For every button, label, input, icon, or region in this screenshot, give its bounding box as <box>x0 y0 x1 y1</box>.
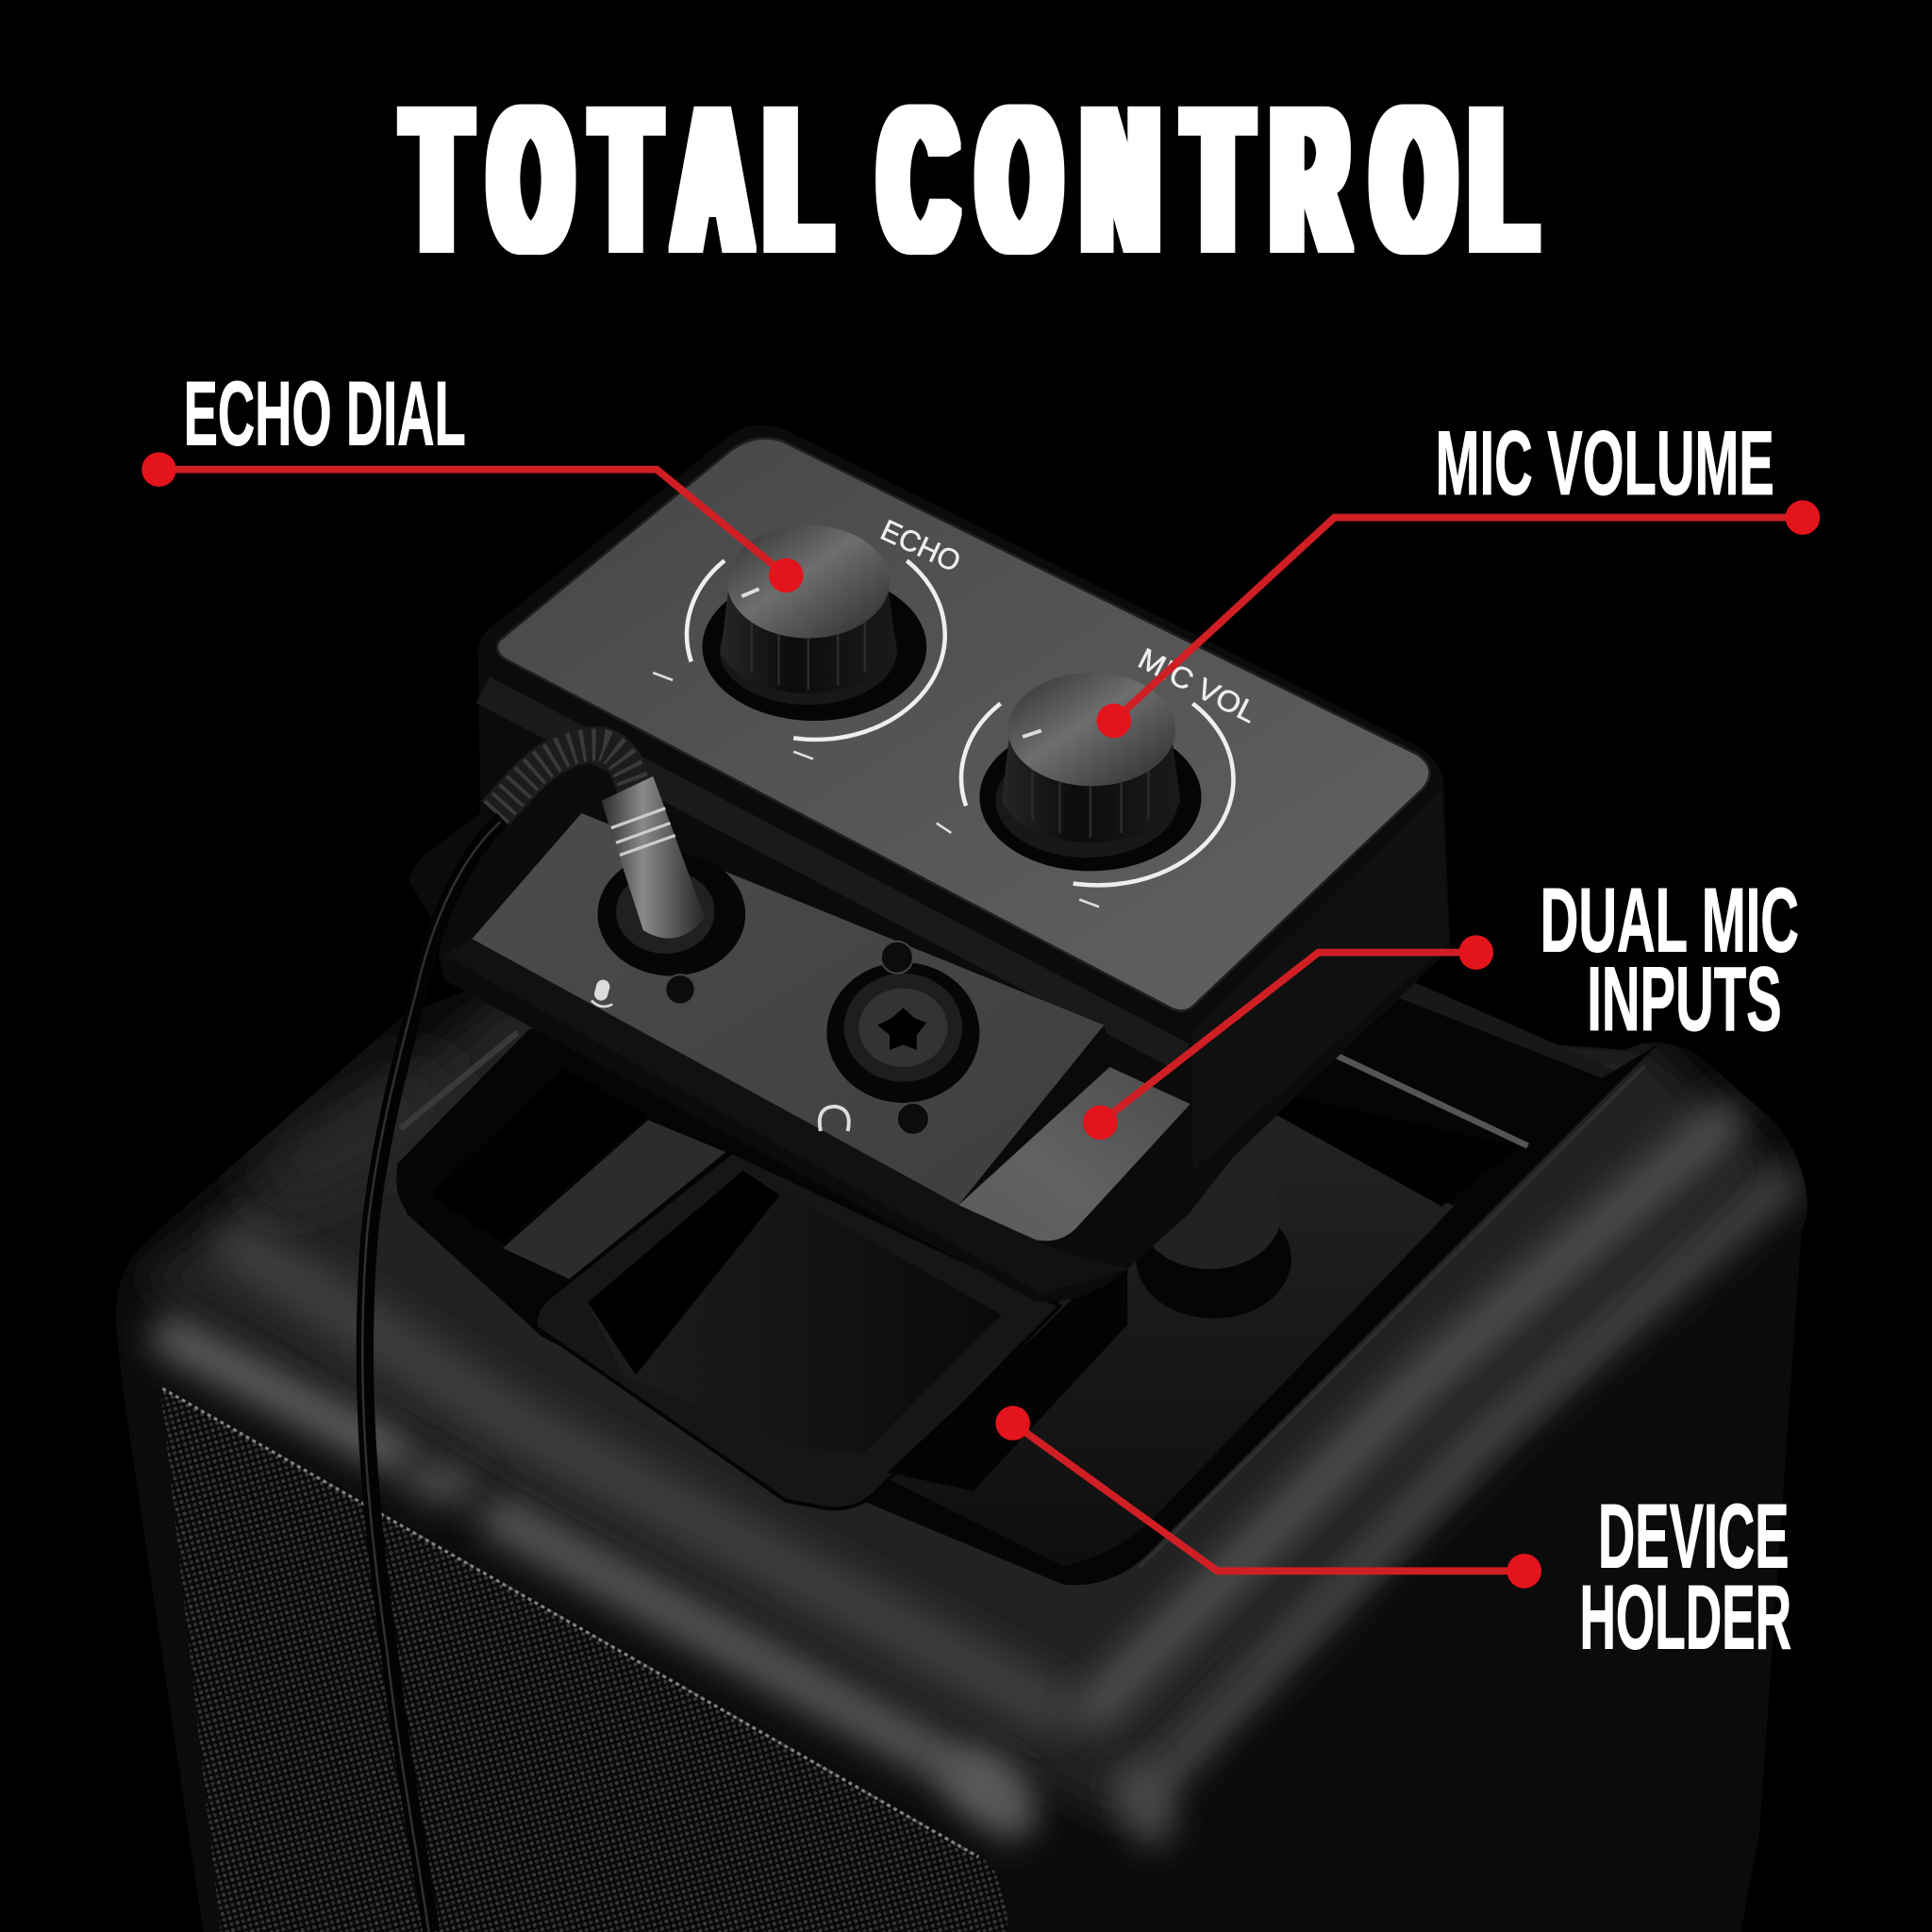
tray frame lower <box>403 1164 557 1291</box>
dual start dot <box>1458 935 1493 970</box>
side lip highlights <box>483 690 1183 1058</box>
well rim highlight <box>1140 1066 1645 1567</box>
holder notch <box>588 1171 780 1375</box>
lower panel face <box>472 813 1104 1205</box>
top plate <box>497 438 1430 1011</box>
barrel rings <box>611 808 675 855</box>
speaker body <box>116 974 1807 1932</box>
black well <box>397 961 1657 1585</box>
mic base ring <box>979 724 1201 871</box>
callout: dual mic inputs <box>1083 870 1799 1140</box>
echo heading: ECHO DIAL <box>184 364 466 465</box>
mic volume dial <box>961 641 1262 885</box>
holder start dot <box>995 1406 1030 1441</box>
holder opening <box>588 1183 1002 1453</box>
top surface and moulded highlights <box>138 986 1783 1824</box>
echo base ring <box>702 573 926 721</box>
echo knob ribs <box>752 623 865 690</box>
combo XLR socket <box>826 962 979 1103</box>
mic leader <box>1114 518 1803 721</box>
left tray slot <box>431 1068 648 1243</box>
rear handle <box>1306 967 1614 1140</box>
mic knob ribs <box>1033 770 1148 838</box>
callout: mic volume <box>1096 413 1820 738</box>
echo knob body <box>721 579 897 693</box>
icon: headphones <box>820 1107 849 1131</box>
wedge face <box>958 1062 1191 1241</box>
wedge shadow <box>958 1025 1115 1205</box>
scale marks <box>653 673 1099 907</box>
mic knob body <box>1002 727 1180 842</box>
dual leader <box>1100 953 1476 1123</box>
dual heading line 2: INPUTS <box>1587 949 1782 1050</box>
echo start dot <box>142 452 176 487</box>
mic start dot <box>1786 500 1820 535</box>
phone dock <box>887 1244 1127 1491</box>
holder heading line 1: DEVICE <box>1598 1486 1789 1587</box>
mic scale arc <box>961 704 1233 885</box>
tray rib <box>503 1120 725 1279</box>
top tray and device holder <box>397 961 1657 1585</box>
microphone cable <box>365 820 503 1932</box>
holder end dot <box>1507 1554 1541 1589</box>
jack barrel <box>601 776 705 939</box>
echo label: ECHO <box>875 513 966 578</box>
mic label: MIC VOL <box>1133 641 1262 729</box>
mic end dot <box>1096 704 1131 738</box>
quarter-inch jack <box>495 744 745 975</box>
callout: echo dial <box>142 364 804 592</box>
holder leader <box>1013 1424 1524 1571</box>
icon: microphone <box>591 978 612 1007</box>
echo knob top <box>727 525 890 639</box>
tray frame <box>400 1033 518 1128</box>
jack ring <box>597 853 745 975</box>
echo dial <box>687 513 966 740</box>
speaker grille <box>160 1386 1008 1932</box>
rear slot <box>1268 1093 1519 1207</box>
control module <box>409 425 1450 1302</box>
callout: device holder <box>995 1406 1791 1669</box>
lower face under lip <box>443 939 1127 1293</box>
echo scale arc <box>687 560 945 740</box>
small rear knob <box>1136 1158 1291 1319</box>
mic knob top <box>1008 673 1175 786</box>
title: TOTAL CONTROL <box>406 67 1534 293</box>
echo leader <box>158 470 786 575</box>
dual end dot <box>1083 1106 1118 1140</box>
well floor <box>887 1110 1454 1566</box>
screws <box>665 941 929 1135</box>
grille top edge highlight <box>162 1389 978 1857</box>
device holder frame <box>536 1152 1059 1508</box>
body silhouette <box>116 974 1807 1932</box>
slot rim <box>1327 1051 1528 1146</box>
module black housing <box>409 425 1450 1302</box>
echo end dot <box>769 558 804 592</box>
strain relief <box>495 744 639 813</box>
